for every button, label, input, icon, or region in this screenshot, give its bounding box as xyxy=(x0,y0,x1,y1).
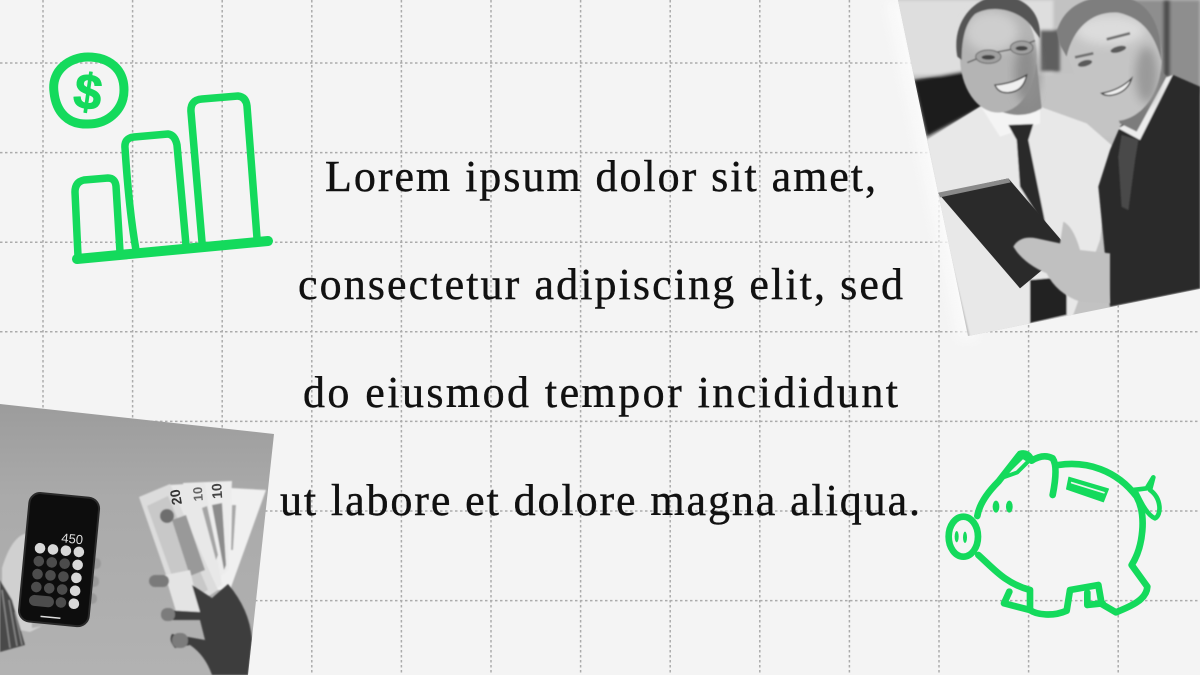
tablet and hand xyxy=(938,178,1068,288)
text line 2: consectetur adipiscing elit, sed xyxy=(298,260,903,309)
photo: two businessmen with tablet xyxy=(880,0,1200,340)
main text block xyxy=(280,152,920,525)
photo: phone calculator and cash in hands: 20 xyxy=(166,488,185,506)
cash fan xyxy=(138,480,266,596)
icon: rising bars xyxy=(75,96,268,259)
icon: dollar coin xyxy=(54,57,124,124)
text line 3: do eiusmod tempor incididunt xyxy=(303,368,898,417)
phone xyxy=(18,492,100,627)
left hand xyxy=(0,533,101,652)
icon: dollar coin: $ xyxy=(70,62,106,122)
text line 1: Lorem ipsum dolor sit amet, xyxy=(325,152,876,201)
photo: phone calculator and cash in hands xyxy=(0,404,280,675)
icon: bar chart with dollar coin xyxy=(54,57,268,259)
right hand xyxy=(149,570,252,675)
left man xyxy=(927,0,1113,337)
right man xyxy=(1057,0,1200,307)
photo: phone calculator and cash in hands: 10 xyxy=(190,486,206,502)
photo: phone calculator and cash in hands: 10 xyxy=(208,483,225,499)
text line 4: ut labore et dolore magna aliqua. xyxy=(280,476,920,525)
phone: 450 xyxy=(61,530,84,547)
icon: piggy bank xyxy=(949,454,1160,615)
